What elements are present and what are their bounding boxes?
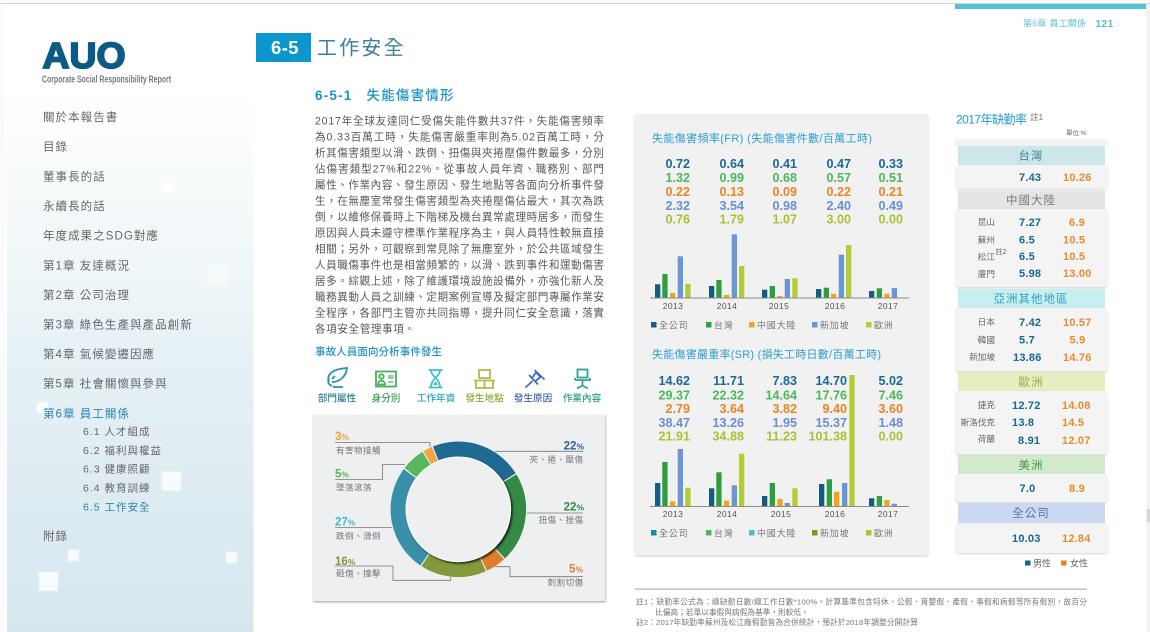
section heading 6-5: 工作安全 — [317, 36, 406, 60]
SR values: 3.60 — [878, 402, 903, 416]
label: falls from height 5%: 5% — [335, 468, 349, 480]
region: Taiwan: 10.26 — [1063, 172, 1092, 184]
body text: 各項安全管理事項。 — [315, 322, 415, 336]
region: Europe: 12.07 — [1062, 435, 1091, 447]
region: China: 10.5 — [1063, 234, 1085, 246]
region: China: 5.98 — [1019, 268, 1041, 280]
SR values: 7.46 — [878, 388, 903, 402]
analysis heading: 事故人員面向分析事件發生 — [315, 345, 442, 358]
icon: office chair, work content: 作業內容 — [563, 392, 602, 404]
FR bar chart: 2015 — [769, 301, 789, 311]
label: hazardous contact 3%: 有害物接觸 — [336, 444, 381, 456]
region: other Asia — [956, 289, 1107, 371]
region: other Asia: 新加坡 — [969, 351, 995, 362]
SR bar chart: 2015 — [771, 509, 791, 519]
sidebar navigation: 第5章 社會關懷與參與 — [43, 376, 168, 390]
body text: 生，在無塵室常發生傷害類型為夾捲壓傷佔最大，其次為跌 — [315, 194, 604, 208]
SR values: 14.70 — [815, 374, 847, 388]
region: other Asia: 韓國 — [978, 335, 995, 345]
icon: push pin, cause — [514, 370, 552, 404]
sidebar navigation: 第3章 綠色生產與產品創新 — [43, 318, 193, 332]
SR values: 3.82 — [772, 402, 797, 416]
section heading 6-5: 6-5 — [271, 37, 299, 58]
region: China: 13.00 — [1063, 268, 1092, 280]
label: hazardous contact 3%: 3% — [335, 431, 349, 443]
region: whole company: 全公司 — [1012, 507, 1050, 520]
SR values: 15.37 — [815, 416, 847, 430]
label: cuts 5% — [495, 564, 584, 588]
SR values: 34.88 — [712, 430, 744, 444]
region: Americas: 8.9 — [1069, 483, 1085, 495]
region: Europe: 捷克 — [978, 399, 995, 410]
panel: injury type donut — [313, 415, 605, 601]
label: slips 27%: 27% — [335, 516, 356, 528]
chart title: FR: 失能傷害頻率(FR) (失能傷害件數/百萬工時) — [652, 131, 872, 145]
FR legend: 台灣 — [714, 320, 734, 330]
region: Taiwan — [956, 146, 1107, 189]
SR values: 14.62 — [658, 374, 690, 388]
region: China: 中國大陸 — [1006, 193, 1056, 207]
region: Europe — [956, 372, 1107, 454]
FR values: 3.00 — [826, 212, 851, 226]
region: other Asia: 10.57 — [1063, 317, 1092, 329]
SR legend: 歐洲 — [874, 528, 894, 538]
region: Europe: 14.5 — [1062, 417, 1084, 429]
FR values: 1.32 — [665, 171, 690, 185]
legend: male and female: 男性 — [1033, 558, 1051, 568]
icon: desk, location: 發生地點 — [465, 392, 504, 404]
SR values: 101.38 — [808, 430, 847, 444]
FR legend: 全公司 — [659, 320, 688, 330]
region: Europe: 14.08 — [1062, 400, 1091, 412]
FR values: 0.68 — [772, 171, 797, 185]
sidebar navigation: 6.4 教育訓練 — [83, 482, 151, 494]
SR legend: 全公司 — [659, 528, 688, 538]
legend: male and female — [1025, 558, 1088, 568]
SR values: 9.40 — [822, 402, 847, 416]
FR legend: 新加坡 — [820, 320, 849, 330]
label: sprain 22%: 22% — [564, 502, 584, 514]
region: Europe: 斯洛伐克 — [961, 416, 995, 428]
FR values: 0.33 — [878, 157, 903, 171]
label: struck 16% — [335, 556, 451, 580]
label: caught 22%: 22% — [564, 440, 584, 452]
region: China: 昆山 — [978, 217, 995, 227]
footnotes: 比偏高；若單以事假與病假為基準，則較低。 — [655, 607, 809, 617]
sidebar navigation: 目錄 — [43, 140, 68, 154]
FR values — [665, 157, 903, 226]
sidebar navigation: 年度成果之SDG對應 — [43, 228, 159, 242]
SR legend — [651, 528, 894, 538]
panel: FR and SR charts — [635, 114, 928, 555]
icon: ID card, identity — [372, 372, 400, 404]
absence rate title — [956, 112, 1087, 137]
region: Europe: 歐洲 — [1018, 375, 1044, 389]
SR bar chart — [650, 375, 909, 519]
SR bar chart: 2017 — [878, 509, 898, 519]
label: hazardous contact 3% — [335, 431, 430, 456]
footnotes: 註1：缺勤率公式為：總缺勤日數/總工作日數*100%。計算基準包含特休、公假、育嬰假、產假、事假和病假等所有假別，故百分 — [636, 596, 1087, 606]
label: falls from height 5%: 墜落滾落 — [336, 482, 372, 492]
FR legend: 中國大陸 — [757, 320, 796, 330]
section heading 6-5 — [256, 33, 406, 62]
FR values: 1.07 — [772, 212, 797, 226]
label: sprain 22%: 扭傷、挫傷 — [539, 514, 584, 525]
FR values: 0.72 — [665, 157, 690, 171]
body text: 析其傷害類型以滑、跌倒、扭傷與夾捲壓傷件數最多，分別 — [315, 146, 604, 160]
icon row — [318, 368, 602, 404]
region: Americas: 美洲 — [1018, 458, 1044, 472]
region: other Asia: 14.76 — [1063, 352, 1092, 364]
FR values: 0.64 — [719, 157, 744, 171]
SR values: 11.23 — [766, 430, 797, 444]
region: Taiwan: 7.43 — [1019, 172, 1041, 184]
subheading 6-5-1: 失能傷害情形 — [366, 87, 454, 103]
region: Americas — [956, 455, 1107, 502]
region: Europe: 荷蘭 — [978, 433, 995, 444]
FR values: 0.13 — [719, 185, 744, 199]
sidebar navigation: 關於本報告書 — [43, 110, 118, 124]
SR values: 3.64 — [719, 402, 744, 416]
region: China: 註2 — [996, 247, 1006, 256]
sidebar panel — [7, 90, 254, 632]
sidebar navigation: 第2章 公司治理 — [43, 288, 130, 302]
region: China: 7.27 — [1019, 217, 1041, 229]
SR bar chart: 2016 — [825, 509, 845, 519]
icon: feather, department: 部門屬性 — [318, 392, 357, 404]
icon: desk, location — [465, 370, 504, 404]
body text: 全程序，各部門主管亦共同指導，提升同仁安全意識，落實 — [315, 306, 604, 320]
icon: feather, department — [318, 368, 357, 404]
FR bar chart — [650, 234, 909, 311]
absence rate table — [956, 139, 1107, 568]
sidebar navigation: 6.3 健康照顧 — [83, 462, 151, 476]
region: other Asia: 7.42 — [1019, 317, 1041, 329]
subheading 6-5-1 — [315, 87, 454, 103]
FR legend: 歐洲 — [874, 320, 894, 330]
FR values: 0.76 — [665, 212, 690, 226]
footnotes: 註2：2017年缺勤率蘇州及松江廠假勤皆為合併統計，預計於2018年調整分開計算 — [636, 617, 918, 627]
FR values: 0.98 — [772, 199, 797, 213]
page header — [1023, 18, 1114, 30]
SR values: 17.76 — [815, 388, 847, 402]
FR bar chart: 2017 — [878, 301, 898, 311]
label: falls from height 5% — [335, 464, 405, 492]
SR legend: 台灣 — [714, 528, 734, 538]
region: Europe: 13.8 — [1012, 417, 1034, 429]
region: other Asia: 亞洲其他地區 — [994, 292, 1068, 306]
page header: 121 — [1096, 19, 1114, 30]
region: whole company — [956, 503, 1107, 553]
label: cuts 5%: 5% — [569, 564, 583, 576]
SR values — [658, 374, 903, 444]
SR values: 1.95 — [772, 416, 797, 430]
FR values: 0.49 — [878, 199, 903, 213]
FR values: 0.22 — [665, 185, 690, 199]
absence rate title: 單位:% — [1066, 128, 1087, 137]
region: China: 6.9 — [1069, 217, 1085, 229]
region: Taiwan: 台灣 — [1018, 148, 1044, 162]
SR values: 1.48 — [878, 416, 903, 430]
label: caught 22% — [495, 440, 584, 464]
SR bar chart: 2014 — [717, 509, 737, 519]
sidebar navigation: 附錄 — [43, 529, 68, 543]
FR values: 0.47 — [826, 157, 851, 171]
region: other Asia: 日本 — [978, 316, 995, 327]
sidebar navigation: 第1章 友達概況 — [43, 258, 130, 272]
subheading 6-5-1: 6-5-1 — [315, 88, 353, 103]
SR legend: 新加坡 — [820, 528, 849, 538]
region: other Asia: 5.9 — [1070, 334, 1085, 346]
icon: push pin, cause: 發生原因 — [514, 392, 552, 404]
region: China: 松江 — [978, 251, 995, 262]
absence rate title: 註1 — [1030, 112, 1044, 122]
region: Europe: 8.91 — [1018, 435, 1040, 447]
FR legend — [651, 320, 894, 330]
icon: office chair, work content — [563, 370, 602, 404]
region: China: 6.5 — [1019, 234, 1035, 246]
FR values: 0.57 — [826, 171, 851, 185]
body text: 屬性、作業內容、發生原因、發生地點等各面向分析事件發 — [315, 178, 604, 192]
region: China: 6.5 — [1019, 251, 1035, 263]
donut chart — [374, 425, 543, 594]
label: struck 16%: 砸傷、撞擊 — [336, 568, 381, 578]
region: other Asia: 13.86 — [1013, 352, 1042, 364]
sidebar navigation: 6.2 福利與權益 — [83, 444, 162, 457]
FR values: 0.51 — [878, 171, 903, 185]
label: cuts 5%: 刺割切傷 — [548, 576, 584, 588]
absence rate title: 2017年缺勤率 — [956, 112, 1027, 126]
FR values: 0.99 — [719, 171, 744, 185]
logo: AUO: AUO — [42, 35, 126, 76]
SR values: 22.32 — [712, 388, 744, 402]
icon: hourglass, seniority: 工作年資 — [417, 392, 456, 404]
SR legend: 中國大陸 — [757, 528, 796, 538]
FR values: 0.00 — [878, 212, 903, 226]
logo: AUO: Corporate Social Responsibility Report — [42, 74, 171, 86]
page header: 第6章 員工關係 — [1023, 18, 1086, 28]
legend: male and female: 女性 — [1070, 558, 1088, 568]
label: sprain 22% — [527, 502, 584, 525]
FR values: 0.41 — [772, 157, 797, 171]
region: China: 蘇州 — [978, 234, 995, 245]
icon: hourglass, seniority — [417, 370, 456, 404]
SR values: 14.64 — [765, 388, 797, 402]
sidebar navigation: 第4章 氣候變遷因應 — [43, 347, 155, 361]
body text: 倒，以維修保養時上下階梯及機台異常處理時居多，而發生 — [315, 210, 604, 224]
FR values: 1.79 — [719, 212, 744, 226]
FR values: 0.22 — [826, 185, 851, 199]
SR values: 29.37 — [658, 388, 690, 402]
FR values: 2.40 — [826, 199, 851, 213]
FR values: 3.54 — [719, 199, 744, 213]
FR values: 2.32 — [665, 199, 690, 213]
region: other Asia: 5.7 — [1019, 334, 1035, 346]
logo: AUO — [42, 35, 171, 86]
body text: 佔傷害類型27%和22%。從事故人員年資、職務別、部門 — [315, 162, 604, 176]
SR values: 21.91 — [658, 430, 690, 444]
SR values: 38.47 — [658, 416, 690, 430]
label: slips 27%: 跌倒、滑倒 — [336, 530, 381, 541]
SR values: 13.26 — [712, 416, 744, 430]
label: slips 27% — [335, 516, 392, 541]
sidebar navigation — [43, 110, 193, 543]
sidebar navigation: 永續長的話 — [43, 199, 106, 213]
sidebar navigation: 6.5 工作安全 — [83, 500, 151, 514]
sidebar navigation: 第6章 員工關係 — [43, 406, 130, 420]
FR bar chart: 2014 — [717, 301, 737, 311]
SR values: 7.83 — [772, 374, 797, 388]
body text — [315, 114, 604, 336]
label: caught 22%: 夾、捲、壓傷 — [530, 454, 584, 464]
FR bar chart: 2013 — [663, 301, 683, 311]
SR values: 2.79 — [665, 402, 690, 416]
SR values: 0.00 — [878, 430, 903, 444]
FR bar chart: 2016 — [825, 301, 845, 311]
top accent bar — [955, 4, 1146, 9]
region: Americas: 7.0 — [1020, 483, 1035, 495]
SR bar chart: 2013 — [663, 509, 683, 519]
body text: 2017年全球友達同仁受傷失能件數共37件，失能傷害頻率 — [315, 114, 604, 128]
body text: 職務異動人員之訓練、定期案例宣導及擬定部門專屬作業安 — [315, 290, 604, 304]
SR values: 5.02 — [878, 374, 903, 388]
body text: 相關；另外，可觀察到常見除了無塵室外，於公共區域發生 — [315, 242, 604, 256]
region: Europe: 12.72 — [1012, 400, 1041, 412]
label: struck 16%: 16% — [335, 556, 356, 568]
FR values: 0.09 — [772, 185, 797, 199]
icon: ID card, identity: 身分別 — [372, 392, 400, 404]
region: China: 廈門 — [978, 268, 995, 279]
region: China: 10.5 — [1063, 251, 1085, 263]
footnotes — [635, 588, 1087, 627]
region: China — [956, 191, 1107, 287]
region: whole company: 12.84 — [1062, 533, 1091, 545]
chart title: SR: 失能傷害嚴重率(SR) (損失工時日數/百萬工時) — [652, 347, 881, 361]
sidebar navigation: 董事長的話 — [43, 170, 106, 184]
sidebar navigation: 6.1 人才組成 — [83, 425, 151, 438]
body text: 居多。綜觀上述，除了維護環境設施設備外，亦強化新人及 — [315, 274, 604, 288]
FR values: 0.21 — [878, 185, 903, 199]
body text: 人員職傷事件也是相當頻繁的，以滑、跌到事件和運動傷害 — [315, 258, 604, 272]
SR values: 11.71 — [713, 374, 744, 388]
body text: 為0.33百萬工時，失能傷害嚴重率則為5.02百萬工時，分 — [315, 130, 604, 144]
region: whole company: 10.03 — [1012, 533, 1041, 545]
body text: 原因與人員未遵守標準作業程序為主，與人員特性較無直接 — [315, 226, 604, 240]
